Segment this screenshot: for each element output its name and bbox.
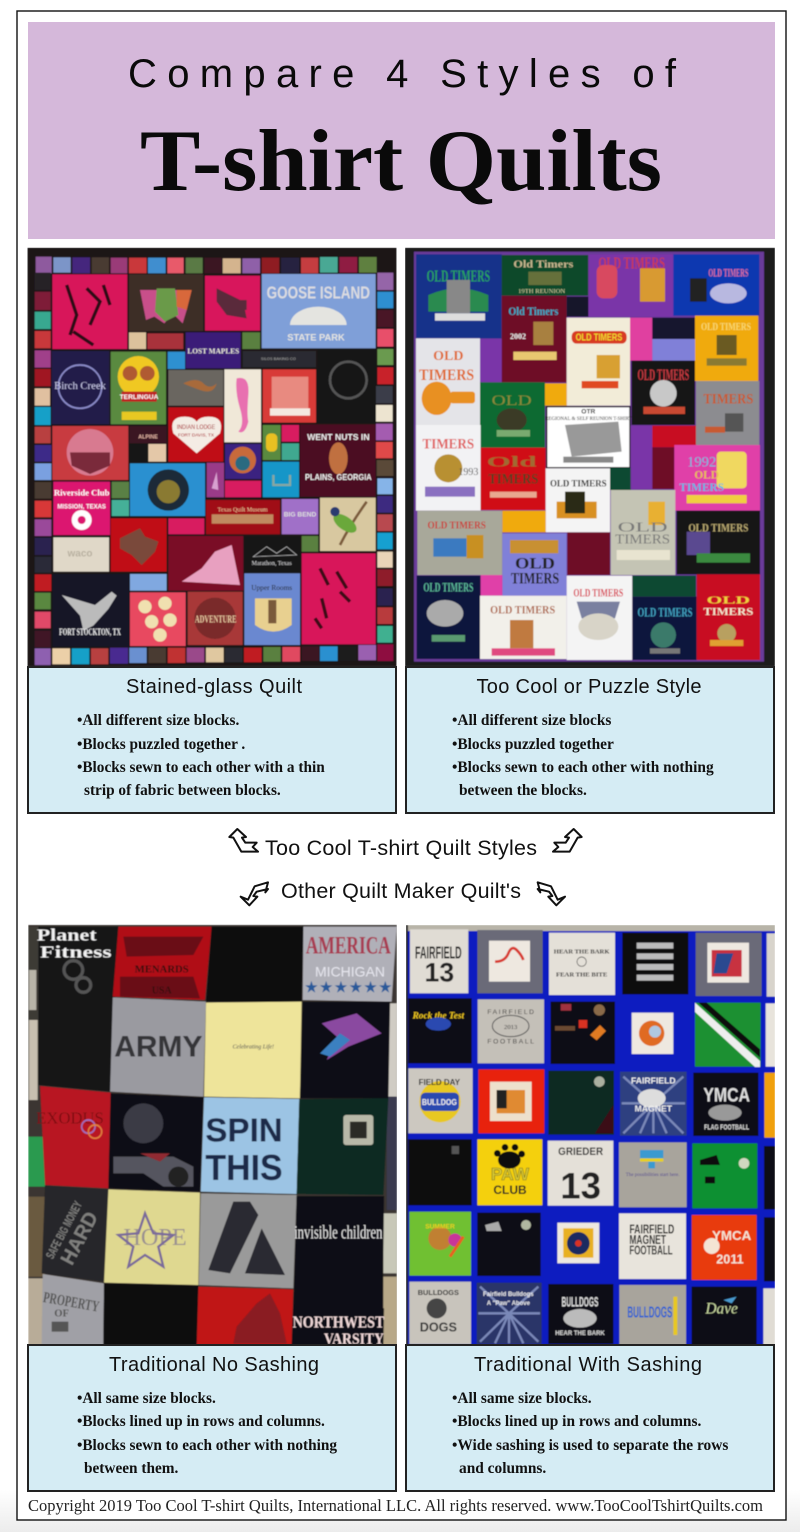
- quilt photo: with sashing: A "Paw" Above: [487, 1301, 531, 1307]
- caption bullets: [77, 1390, 337, 1477]
- quilt photo: stained-glass: PLAINS, GEORGIA: [305, 472, 372, 482]
- quilt photo: puzzle style: OLD TIMERS: [708, 266, 748, 280]
- caption heading: Stained-glass Quilt: [126, 676, 302, 698]
- quilt photo: stained-glass: MISSION, TEXAS: [57, 504, 106, 510]
- title line two: T-shirt Quilts: [140, 113, 662, 210]
- copyright footer: Copyright 2019 Too Cool T-shirt Quilts, International LLC. All rights reserved. www.TooCoolTshirtQuilts.com: [28, 1496, 763, 1515]
- quilt photo: stained-glass: ALPINE: [138, 434, 158, 440]
- quilt photo: with sashing: FLAG FOOTBALL: [704, 1122, 750, 1131]
- quilt photo: with sashing: 13: [425, 958, 454, 988]
- quilt photo: no sashing: MENARDS: [135, 965, 189, 976]
- quilt photo: with sashing: GRIEDER: [558, 1146, 603, 1158]
- caption bullets: •Blocks sewn to each other with nothing: [452, 759, 714, 776]
- quilt photo: with sashing: HEAR THE BARK: [555, 1331, 605, 1337]
- caption bullets: •All different size blocks.: [77, 712, 239, 729]
- quilt photo: stained-glass: FORT STOCKTON, TX: [59, 628, 121, 638]
- quilt photo: stained-glass: [27, 248, 397, 667]
- panel: too cool puzzle quilt: [405, 248, 775, 813]
- quilt photo: with sashing: YMCA: [703, 1086, 750, 1107]
- quilt photo: with sashing: MAGNET: [629, 1233, 666, 1247]
- caption bullets: •Blocks sewn to each other with nothing: [77, 1437, 337, 1454]
- quilt photo: puzzle style: OLD: [707, 595, 750, 606]
- quilt photo: no sashing: OF: [54, 1309, 69, 1320]
- quilt photo: puzzle style: OLD TIMERS: [576, 333, 623, 344]
- quilt photo: puzzle style: 19TH REUNION: [518, 288, 565, 295]
- caption bullets: •Blocks sewn to each other with a thin: [77, 759, 325, 776]
- quilt photo: with sashing: FAIRFIELD: [629, 1222, 674, 1236]
- quilt photo: puzzle style: 1993: [458, 467, 478, 478]
- quilt photo: stained-glass: ADVENTURE: [195, 614, 237, 625]
- quilt photo: stained-glass: STATE PARK: [287, 333, 345, 343]
- panel: traditional with sashing: [406, 925, 775, 1491]
- quilt photo: no sashing: SPIN: [205, 1113, 283, 1150]
- quilt photo: no sashing: VARSITY: [324, 1331, 384, 1348]
- quilt photo: with sashing: Dave: [704, 1300, 738, 1317]
- icon: arrow down-left: [241, 882, 268, 905]
- quilt photo: no sashing: HARD: [57, 1208, 103, 1269]
- quilt photo: no sashing: NORTHWEST: [293, 1312, 385, 1331]
- heading text: Too Cool T-shirt Quilt Styles: [265, 836, 537, 860]
- quilt photo: puzzle style: TIMERS: [679, 482, 724, 494]
- quilt photo: stained-glass: SILOS BAKING CO: [261, 356, 296, 361]
- quilt photo: puzzle style: TIMERS: [422, 436, 474, 452]
- quilt photo: no sashing: MICHIGAN: [315, 964, 385, 980]
- quilt photo: puzzle style: TIMERS: [511, 570, 559, 587]
- quilt photo: no sashing: Celebrating Life!: [233, 1043, 274, 1050]
- title line one: Compare 4 Styles of: [128, 52, 677, 96]
- quilt photo: puzzle style: OLD: [433, 349, 463, 364]
- caption: puzzle style: [406, 667, 774, 813]
- section label: other makers: [241, 879, 565, 905]
- quilt photo: with sashing: 13: [560, 1165, 601, 1206]
- quilt photo: puzzle style: 2002: [510, 332, 526, 341]
- quilt photo: no sashing: USA: [152, 985, 172, 996]
- quilt photo: no sashing: HOPE: [123, 1224, 187, 1251]
- caption bullets: between the blocks.: [459, 782, 587, 799]
- quilt photo: no sashing: AMERICA: [306, 931, 391, 959]
- title banner: [28, 22, 775, 239]
- quilt photo: with sashing: FOOTBALL: [487, 1038, 534, 1045]
- quilt photo: with sashing: Rock the Test: [412, 1011, 464, 1021]
- quilt photo: with sashing: FAIRFIELD: [487, 1009, 534, 1016]
- caption bullets: •All same size blocks.: [452, 1390, 592, 1407]
- quilt photo: puzzle style: OLD: [694, 469, 719, 481]
- caption bullets: [77, 712, 325, 799]
- quilt photo: puzzle style: OLD: [492, 393, 532, 409]
- quilt photo: stained-glass: waco: [67, 549, 92, 560]
- quilt photo: puzzle style: Old: [487, 455, 537, 471]
- quilt photo: puzzle style: OLD TIMERS: [598, 253, 665, 272]
- quilt photo: with sashing: The possibilities start here.: [626, 1173, 680, 1178]
- caption: with sashing: [406, 1345, 774, 1491]
- caption heading: Traditional No Sashing: [109, 1354, 319, 1376]
- quilt photo: puzzle style: REGIONAL & SELF REUNION T-SHIRT: [545, 417, 632, 422]
- quilt photo: puzzle style: OLD: [515, 555, 555, 572]
- quilt photo: stained-glass: FORT DAVIS, TX: [178, 432, 215, 437]
- caption bullets: and columns.: [459, 1460, 546, 1477]
- caption bullets: [452, 1390, 728, 1477]
- quilt photo: stained-glass: Texas Quilt Museum: [218, 508, 268, 514]
- quilt photo: with sashing: BULLDOGS: [627, 1304, 672, 1321]
- quilt photo: puzzle style: OLD TIMERS: [637, 367, 689, 384]
- quilt photo: with sashing: PAW: [491, 1164, 530, 1184]
- quilt photo: stained-glass: Upper Rooms: [251, 583, 292, 592]
- caption bullets: •All different size blocks: [452, 712, 611, 729]
- quilt photo: puzzle style: Old Timers: [508, 304, 559, 318]
- quilt photo: stained-glass: Birch Creek: [54, 381, 107, 392]
- quilt photo: no sashing: [28, 925, 397, 1348]
- quilt photo: with sashing: BULLDOGS: [562, 1294, 598, 1310]
- quilt photo: puzzle style: OLD TIMERS: [423, 581, 473, 595]
- quilt photo: puzzle style: OLD TIMERS: [427, 520, 486, 531]
- caption bullets: between them.: [84, 1460, 178, 1477]
- quilt photo: puzzle style: 1992: [687, 455, 716, 471]
- quilt photo: no sashing: ARMY: [114, 1031, 203, 1064]
- quilt photo: no sashing: SAFE BIG MONEY: [43, 1199, 85, 1261]
- icon: arrow up-right: [553, 829, 582, 852]
- quilt photo: stained-glass: INDIAN LODGE: [177, 425, 215, 431]
- quilt photo: puzzle style: TIMERS: [703, 391, 753, 407]
- quilt photo: puzzle style: Old Timers: [513, 260, 573, 271]
- quilt photo: stained-glass: WENT NUTS IN: [307, 432, 370, 442]
- icon: arrow down-right: [538, 882, 565, 905]
- panel: traditional no sashing: [28, 925, 397, 1491]
- caption: stained-glass: [28, 667, 396, 813]
- quilt photo: with sashing: SUMMER: [425, 1223, 455, 1230]
- quilt photo: puzzle style: OLD TIMERS: [550, 480, 607, 490]
- quilt photo: with sashing: FIELD DAY: [419, 1078, 461, 1087]
- quilt photo: puzzle style: TIMERS: [419, 367, 474, 384]
- quilt photo: with sashing: 2011: [716, 1252, 744, 1266]
- caption: no sashing: [28, 1345, 396, 1491]
- quilt photo: with sashing: [406, 925, 775, 1345]
- quilt photo: with sashing: FOOTBALL: [629, 1243, 673, 1257]
- quilt photo: puzzle style: OLD TIMERS: [688, 523, 748, 535]
- quilt photo: puzzle style: TIMERS: [615, 531, 670, 546]
- quilt photo: puzzle style: OLD TIMERS: [701, 322, 751, 333]
- caption bullets: strip of fabric between blocks.: [84, 782, 281, 799]
- quilt photo: no sashing: invisible children: [294, 1222, 383, 1243]
- quilt photo: puzzle style: OLD: [618, 520, 668, 535]
- quilt photo: stained-glass: Riverside Club: [54, 488, 110, 498]
- quilt photo: puzzle style: OLD TIMERS: [573, 586, 624, 600]
- quilt photo: stained-glass: Marathon, Texas: [252, 561, 292, 567]
- quilt photo: with sashing: FAIRFIELD: [631, 1075, 676, 1085]
- section label: too cool styles: [229, 829, 582, 860]
- quilt photo: no sashing: THIS: [205, 1147, 283, 1188]
- quilt photo: stained-glass: LOST MAPLES: [187, 346, 239, 355]
- panel: stained-glass quilt: [27, 248, 397, 813]
- quilt photo: puzzle style: OLD TIMERS: [490, 602, 555, 616]
- quilt photo: no sashing: EXODUS: [36, 1108, 104, 1127]
- quilt photo: puzzle style: OLD TIMERS: [427, 267, 490, 286]
- caption heading: Traditional With Sashing: [474, 1354, 702, 1376]
- quilt photo: puzzle style: TIMERS: [488, 471, 538, 487]
- quilt photo: puzzle style: [405, 248, 775, 667]
- quilt photo: with sashing: Fairfield Bulldogs: [483, 1292, 534, 1298]
- quilt photo: with sashing: BULLDOG: [422, 1097, 457, 1107]
- quilt photo: with sashing: CLUB: [493, 1183, 527, 1197]
- quilt photo: with sashing: MAGNET: [635, 1104, 673, 1114]
- quilt photo: no sashing: Fitness: [40, 942, 112, 961]
- quilt photo: no sashing: ★★★★★★: [304, 980, 392, 997]
- caption heading: Too Cool or Puzzle Style: [476, 676, 702, 698]
- quilt photo: with sashing: HEAR THE BARK: [554, 948, 610, 955]
- caption bullets: •Blocks puzzled together: [452, 736, 614, 753]
- quilt photo: puzzle style: TIMERS: [703, 607, 753, 618]
- caption bullets: •All same size blocks.: [77, 1390, 216, 1407]
- quilt photo: with sashing: FAIRFIELD: [415, 942, 462, 962]
- quilt photo: no sashing: Planet: [37, 926, 97, 945]
- quilt photo: puzzle style: OTR: [581, 408, 596, 415]
- quilt photo: puzzle style: OLD TIMERS: [637, 606, 692, 620]
- caption bullets: •Blocks puzzled together .: [77, 736, 245, 753]
- caption bullets: •Blocks lined up in rows and columns.: [77, 1413, 325, 1430]
- quilt photo: with sashing: BULLDOGS: [418, 1288, 459, 1297]
- quilt photo: stained-glass: BIG BEND: [284, 512, 316, 519]
- quilt photo: stained-glass: GOOSE ISLAND: [267, 282, 370, 302]
- caption bullets: •Wide sashing is used to separate the rows: [452, 1437, 728, 1454]
- quilt photo: with sashing: FEAR THE BITE: [556, 972, 608, 979]
- quilt photo: with sashing: 2013: [504, 1024, 518, 1031]
- caption bullets: [452, 712, 714, 799]
- quilt photo: stained-glass: TERLINGUA: [120, 394, 159, 401]
- quilt photo: with sashing: YMCA: [712, 1228, 752, 1243]
- heading text: Other Quilt Maker Quilt's: [281, 879, 521, 903]
- icon: arrow up-left: [229, 829, 258, 852]
- caption bullets: •Blocks lined up in rows and columns.: [452, 1413, 701, 1430]
- quilt photo: with sashing: DOGS: [420, 1321, 457, 1335]
- quilt photo: no sashing: PROPERTY: [42, 1289, 101, 1316]
